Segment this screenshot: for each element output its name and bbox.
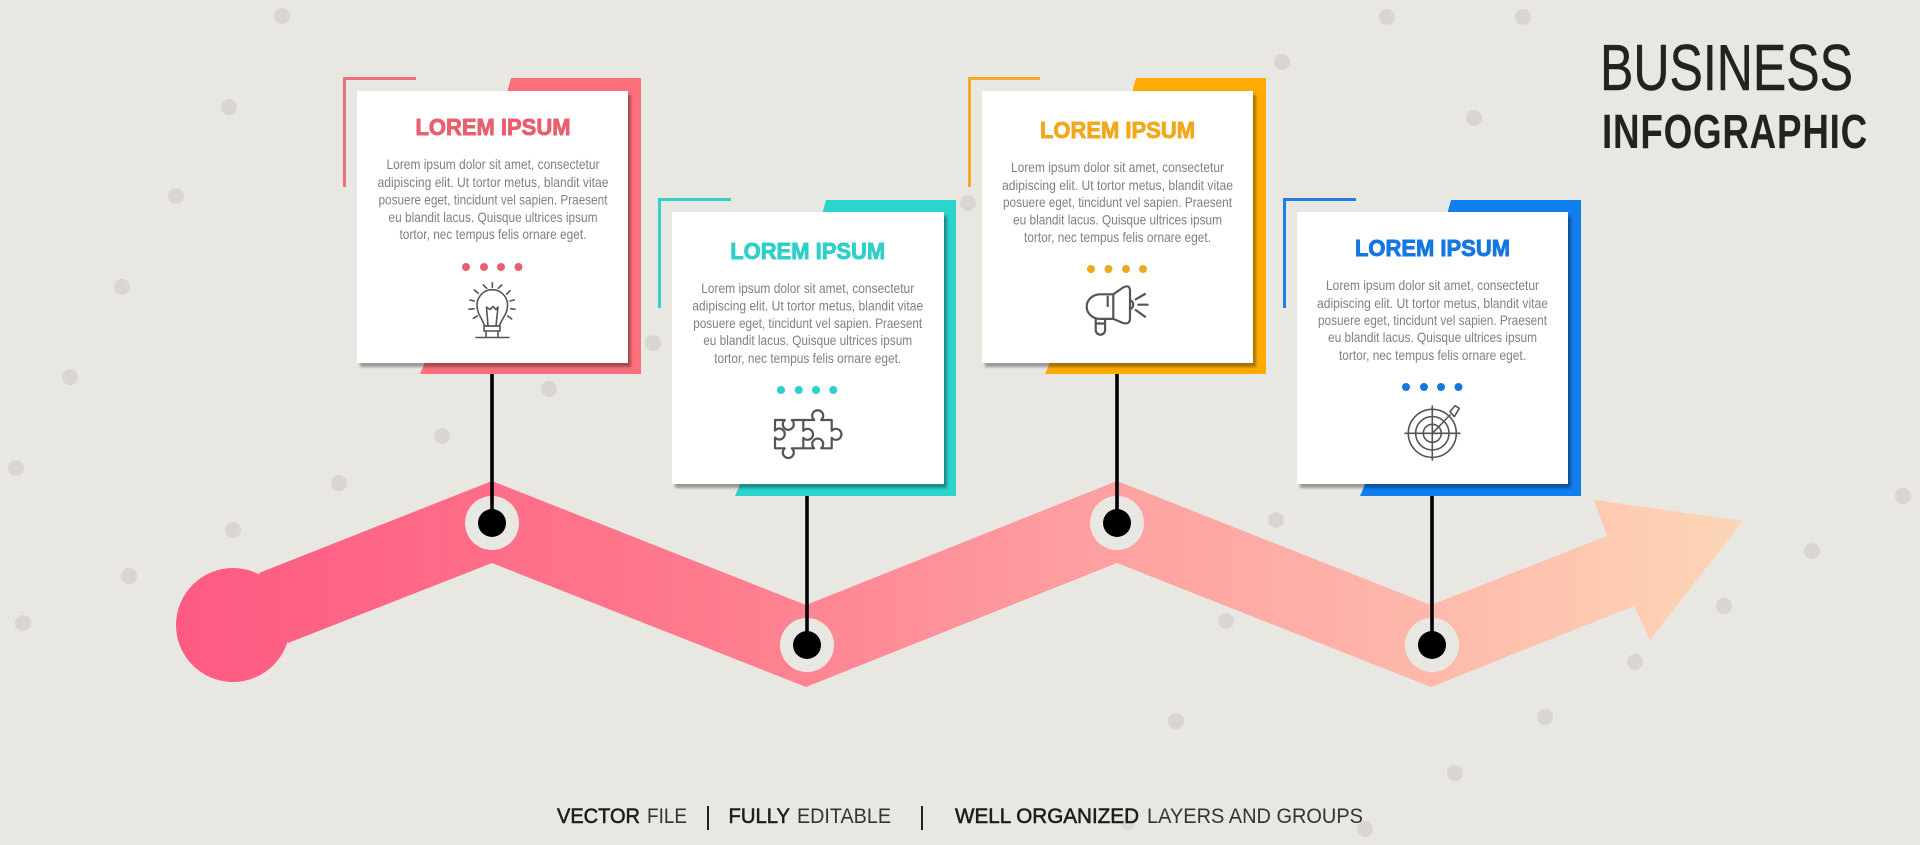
step 2: teal card [660,200,956,672]
stem and node 1 [465,374,519,550]
heading: LOREM IPSUM [416,114,570,140]
body text: tortor, nec tempus felis ornare eget. [400,226,586,242]
body text: eu blandit lacus. Quisque ultrices ipsum [1013,212,1222,228]
body text [1317,277,1548,363]
body text: Lorem ipsum dolor sit amet, consectetur [1326,277,1539,293]
title [1600,31,1868,159]
body text: posuere eget, tincidunt vel sapien. Praesent [1318,312,1547,328]
bracket [970,78,1040,187]
icon: light bulb [469,283,515,338]
colour backing [735,200,956,496]
colour backing [1045,78,1266,374]
stem and node 4 [1405,496,1459,672]
body text: eu blandit lacus. Quisque ultrices ipsum [1328,329,1537,345]
white panel [1297,212,1568,484]
body text: adipiscing elit. Ut tortor metus, blandit vitae [1002,177,1233,193]
icon: megaphone [1087,286,1148,335]
dots [1402,383,1462,391]
body text: tortor, nec tempus felis ornare eget. [1024,229,1211,245]
stem and node 2 [780,496,834,672]
dots [462,263,522,271]
title: BUSINESS [1600,31,1853,104]
step 3: orange card [970,78,1266,550]
icon: puzzle [775,410,841,458]
heading: LOREM IPSUM [730,238,885,264]
step 4: blue card [1284,200,1581,672]
footer text: VECTOR [557,805,640,828]
stem and node 3 [1090,374,1144,550]
bracket [1284,200,1356,308]
white panel [357,91,628,363]
dots [777,386,837,394]
footer text: FULLY [728,805,790,828]
body text: posuere eget, tincidunt vel sapien. Praesent [1003,194,1232,210]
footer text [557,805,1363,830]
body text: tortor, nec tempus felis ornare eget. [714,350,901,366]
white panel [982,91,1253,363]
body text: adipiscing elit. Ut tortor metus, blandit vitae [1317,295,1548,311]
footer text: LAYERS AND GROUPS [1147,805,1363,828]
body text: Lorem ipsum dolor sit amet, consectetur [1011,159,1224,175]
dots [1087,265,1147,273]
step 1: pink card [344,78,641,550]
body text: tortor, nec tempus felis ornare eget. [1339,347,1526,363]
footer text: FILE [647,805,687,828]
body text: eu blandit lacus. Quisque ultrices ipsum [388,209,598,225]
body text: posuere eget, tincidunt vel sapien. Praesent [378,192,608,208]
body text [378,156,609,242]
body text [692,280,923,366]
colour backing [1360,200,1581,496]
footer text: WELL ORGANIZED [955,805,1139,828]
body text: posuere eget, tincidunt vel sapien. Praesent [693,315,922,331]
icon: target [1405,406,1460,460]
zigzag arrow [176,481,1743,687]
body text: adipiscing elit. Ut tortor metus, blandit vitae [692,298,923,314]
bracket [660,200,731,308]
body text: eu blandit lacus. Quisque ultrices ipsum [703,332,912,348]
heading: LOREM IPSUM [1040,117,1195,143]
body text: Lorem ipsum dolor sit amet, consectetur [386,156,600,172]
white panel [672,212,944,484]
footer text: EDITABLE [797,805,891,828]
body text [1002,159,1233,245]
body text: Lorem ipsum dolor sit amet, consectetur [701,280,914,296]
colour backing [420,78,641,374]
heading: LOREM IPSUM [1355,235,1510,261]
bracket [344,78,416,187]
body text: adipiscing elit. Ut tortor metus, blandit vitae [378,174,609,190]
